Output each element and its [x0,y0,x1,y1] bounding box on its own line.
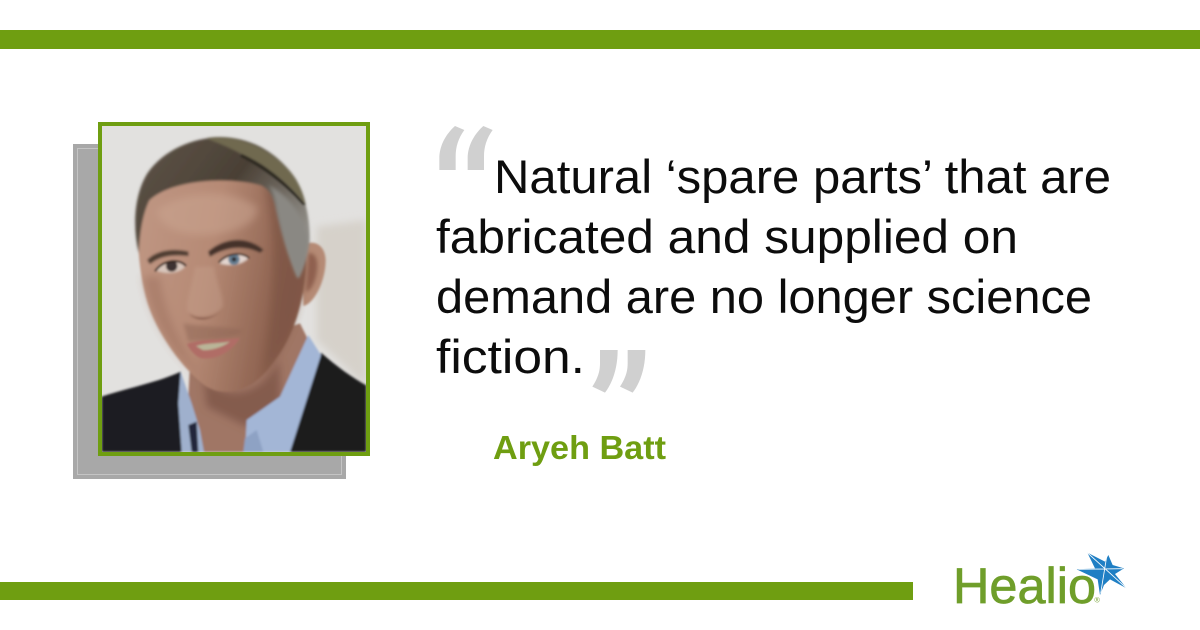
bottom green bar [0,582,913,600]
quote text [436,150,1111,383]
portrait green frame [100,124,368,454]
quote text: fiction. [436,330,585,383]
opening quotation mark [439,126,493,170]
portrait photo of Aryeh Batt [102,126,366,452]
eyebrows [147,250,188,264]
grey hair at the temple [269,186,304,278]
closing quotation mark [592,350,645,393]
attribution name: Aryeh Batt [493,429,666,466]
Healio logo: Healio [953,558,1096,614]
top green bar [0,30,1200,49]
shirt collars [178,372,204,452]
portrait shadow panel [73,144,346,479]
jacket [102,372,185,452]
nose [190,268,222,315]
icon: star [1077,553,1127,605]
hair [135,137,310,278]
ear [302,243,326,306]
quote text: fabricated and supplied on [436,210,1018,263]
neck [188,323,310,452]
quote text: Natural ‘spare parts’ that are [494,150,1111,203]
quote text: demand are no longer science [436,270,1092,323]
icon: star: ® [1094,596,1100,605]
face [138,165,306,392]
eyes [156,262,185,273]
kippah [207,137,306,205]
mouth [187,338,240,359]
